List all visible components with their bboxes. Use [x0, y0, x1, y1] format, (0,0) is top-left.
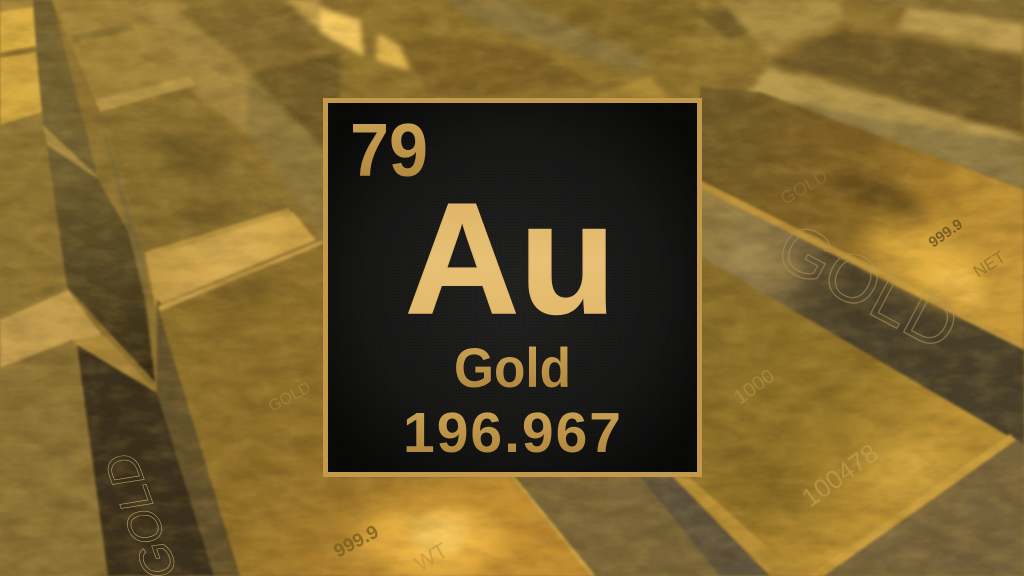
engraved bar stamps: 100478: [796, 438, 884, 513]
element symbol: Au: [405, 171, 616, 347]
right near bars: [510, 87, 1024, 576]
engraved bar stamps: [94, 166, 1009, 576]
engraved bar stamps: GOLD: [765, 208, 971, 366]
highlights and shadows on the metal: [144, 122, 1002, 576]
panel: gold element tile: [323, 98, 702, 477]
tile frame: [323, 98, 702, 477]
top distant bars: [130, 0, 843, 245]
engraved bar stamps: 1000: [730, 365, 779, 409]
right distant bars: [700, 0, 1024, 192]
engraved bar stamps: GOLD: [266, 379, 314, 416]
element name: Gold: [454, 336, 571, 399]
engraved bar stamps: NET: [970, 247, 1009, 281]
engraved bar stamps: GOLD: [777, 166, 831, 208]
engraved bar stamps: WT: [410, 538, 452, 576]
atomic number: 79: [350, 108, 428, 192]
atomic weight: 196.967: [403, 401, 621, 465]
left bars: [0, 0, 592, 576]
tile background: [328, 103, 697, 472]
engraved bar stamps: 999.9: [926, 216, 966, 251]
engraved bar stamps: 999.9: [330, 522, 382, 562]
